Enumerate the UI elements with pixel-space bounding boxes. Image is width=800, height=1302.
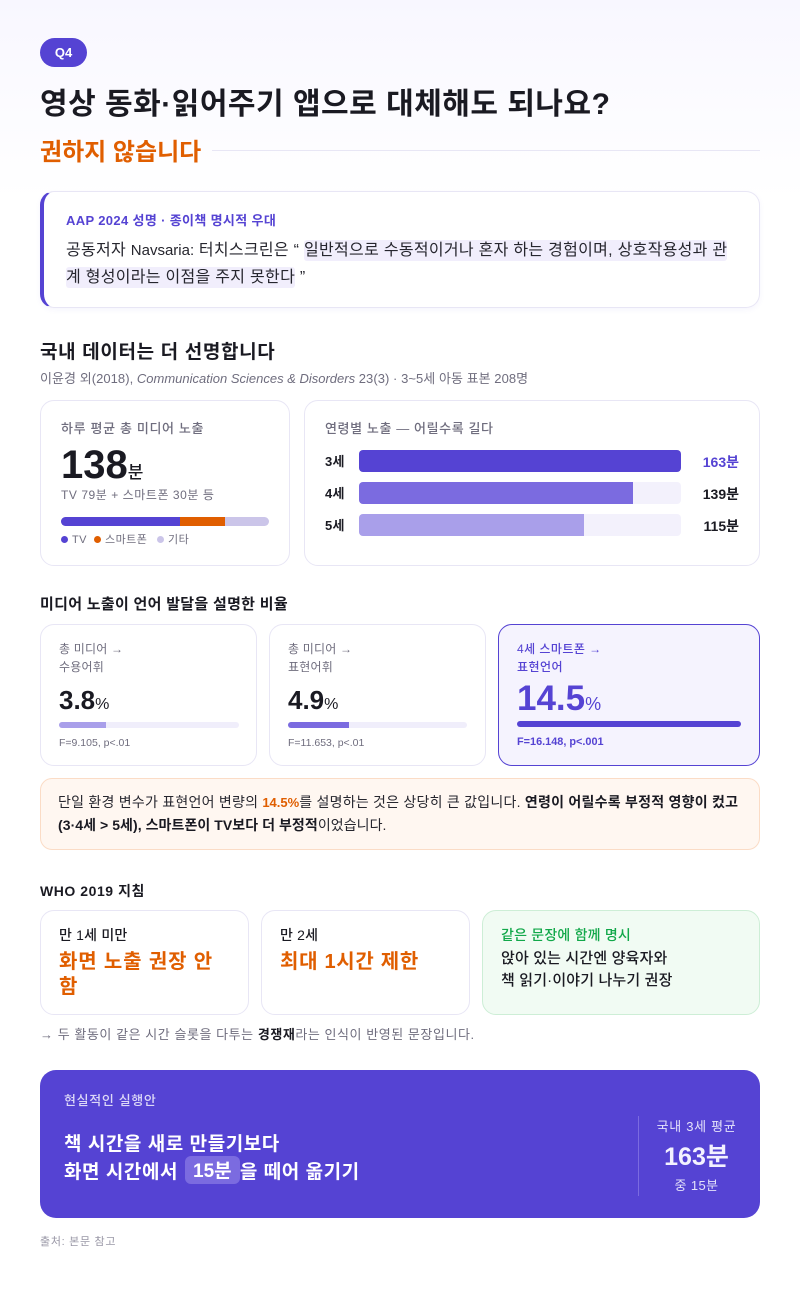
stat note: F=9.105, p<.01 (59, 737, 130, 749)
guideline card: age 2: 만 2세 (280, 927, 318, 943)
divider and stat: 163분 (664, 1143, 729, 1171)
stacked bar (61, 517, 269, 526)
legend: TV (72, 534, 87, 546)
stat card: receptive vocabulary: 총 미디어 → (59, 642, 123, 656)
guideline text: 최대 1시간 제한 (280, 951, 419, 973)
action label: 현실적인 실행안 (64, 1093, 157, 1108)
action text (64, 1134, 360, 1184)
bar: age 5 (325, 514, 739, 536)
bar: age 3 (325, 450, 739, 472)
guideline text: 화면 노출 권장 안 (59, 951, 213, 973)
section heading: domestic data: 국내 데이터는 더 선명합니다 (40, 342, 275, 363)
legend (61, 534, 189, 546)
divider and stat: 중 15분 (674, 1178, 718, 1193)
recommendation text: 앉아 있는 시간엔 양육자와 (501, 950, 667, 967)
stat card: expressive vocabulary: 총 미디어 → (288, 642, 352, 656)
recommendation text (501, 950, 673, 989)
panel: total media exposure (40, 400, 290, 566)
recommendation text: 책 읽기·이야기 나누기 권장 (501, 972, 673, 989)
panel label: 연령별 노출 — 어릴수록 길다 (325, 421, 494, 436)
panel: AAP quote (40, 191, 760, 308)
note: → 두 활동이 같은 시간 슬롯을 다투는 경쟁재라는 인식이 반영된 문장입니다. (40, 1027, 475, 1042)
section heading: WHO: WHO 2019 지침 (40, 883, 145, 899)
bar: age 3: 163분 (703, 454, 739, 470)
bar: age 5: 115분 (704, 518, 739, 534)
legend: 스마트폰 (105, 534, 147, 546)
callout: interpretation: 단일 환경 변수가 표현언어 변량의 14.5%를 설명하는 것은 상당히 큰 값입니다. 연령이 어릴수록 부정적 영향이 컸고 (58, 794, 738, 810)
action text: 책 시간을 새로 만들기보다 (64, 1134, 280, 1155)
stat card: age 4 smartphone highlight: 4세 스마트폰 → (517, 642, 602, 656)
bar: age 4 (325, 482, 739, 504)
guideline text: 함 (59, 976, 78, 998)
stat card: age 4 smartphone highlight: 표현언어 (517, 660, 563, 674)
panel: exposure by age (304, 400, 760, 566)
citation: 이윤경 외(2018), Communication Sciences & Disorders 23(3) · 3~5세 아동 표본 208명 (40, 371, 528, 386)
badge: Q4 (40, 38, 87, 67)
breakdown: TV 79분 + 스마트폰 30분 등 (61, 488, 214, 502)
quote text: 공동저자 Navsaria: 터치스크린은 “ 일반적으로 수동적이거나 혼자 하는 경험이며, 상호작용성과 관 (66, 242, 727, 259)
stat value: 4.9% (288, 685, 338, 715)
stat card: age 4 smartphone highlight (498, 624, 760, 766)
big number: 138분 (61, 443, 143, 487)
stat card: expressive vocabulary: 표현어휘 (288, 660, 333, 674)
guideline card: reading recommendation: 같은 문장에 함께 명시 (501, 927, 631, 943)
stat bar (288, 722, 467, 728)
guideline card: age 2 (261, 910, 470, 1015)
bar: age 4: 4세 (325, 486, 345, 501)
guideline card: reading recommendation (482, 910, 760, 1015)
stat bar (517, 721, 741, 727)
stat bar (59, 722, 239, 728)
bar: age 3: 3세 (325, 454, 345, 469)
bar: age 4: 139분 (703, 486, 739, 502)
verdict heading: 권하지 않습니다 (40, 139, 201, 166)
stat note: F=11.653, p<.01 (288, 737, 364, 749)
quote text (66, 240, 727, 288)
quote text: 계 형성이라는 이점을 주지 못한다 ” (66, 268, 305, 286)
action text: 화면 시간에서 을 떼어 옮기기 (64, 1162, 360, 1183)
divider and stat (638, 1116, 754, 1196)
bar: age 5: 5세 (325, 518, 345, 533)
title: 영상 동화·읽어주기 앱으로 대체해도 되나요? (40, 88, 610, 121)
section heading: explained variance: 미디어 노출이 언어 발달을 설명한 비율 (40, 596, 288, 613)
badge: Q4: Q4 (55, 45, 72, 60)
stat card: receptive vocabulary: 수용어휘 (59, 660, 104, 674)
source: 출처: 본문 참고 (40, 1236, 116, 1248)
legend: 기타 (168, 534, 189, 546)
quote label: AAP 2024 성명 · 종이책 명시적 우대 (66, 213, 276, 228)
stat value: 3.8% (59, 685, 109, 715)
callout: interpretation: (3·4세 > 5세), 스마트폰이 TV보다 더 부정적이었습니다. (58, 817, 386, 833)
guideline text (59, 951, 213, 998)
guideline card: under 1 (40, 910, 249, 1015)
panel label: 하루 평균 총 미디어 노출 (61, 421, 204, 436)
action text: 15분 (193, 1161, 232, 1182)
stat value: 14.5% (517, 679, 601, 718)
stat card: receptive vocabulary (40, 624, 257, 766)
guideline card: under 1: 만 1세 미만 (59, 927, 128, 943)
callout: interpretation (40, 778, 760, 850)
divider and stat: 국내 3세 평균 (657, 1119, 736, 1134)
stat card: expressive vocabulary (269, 624, 486, 766)
stat note: F=16.148, p<.001 (517, 736, 604, 748)
panel: action plan (40, 1070, 760, 1218)
